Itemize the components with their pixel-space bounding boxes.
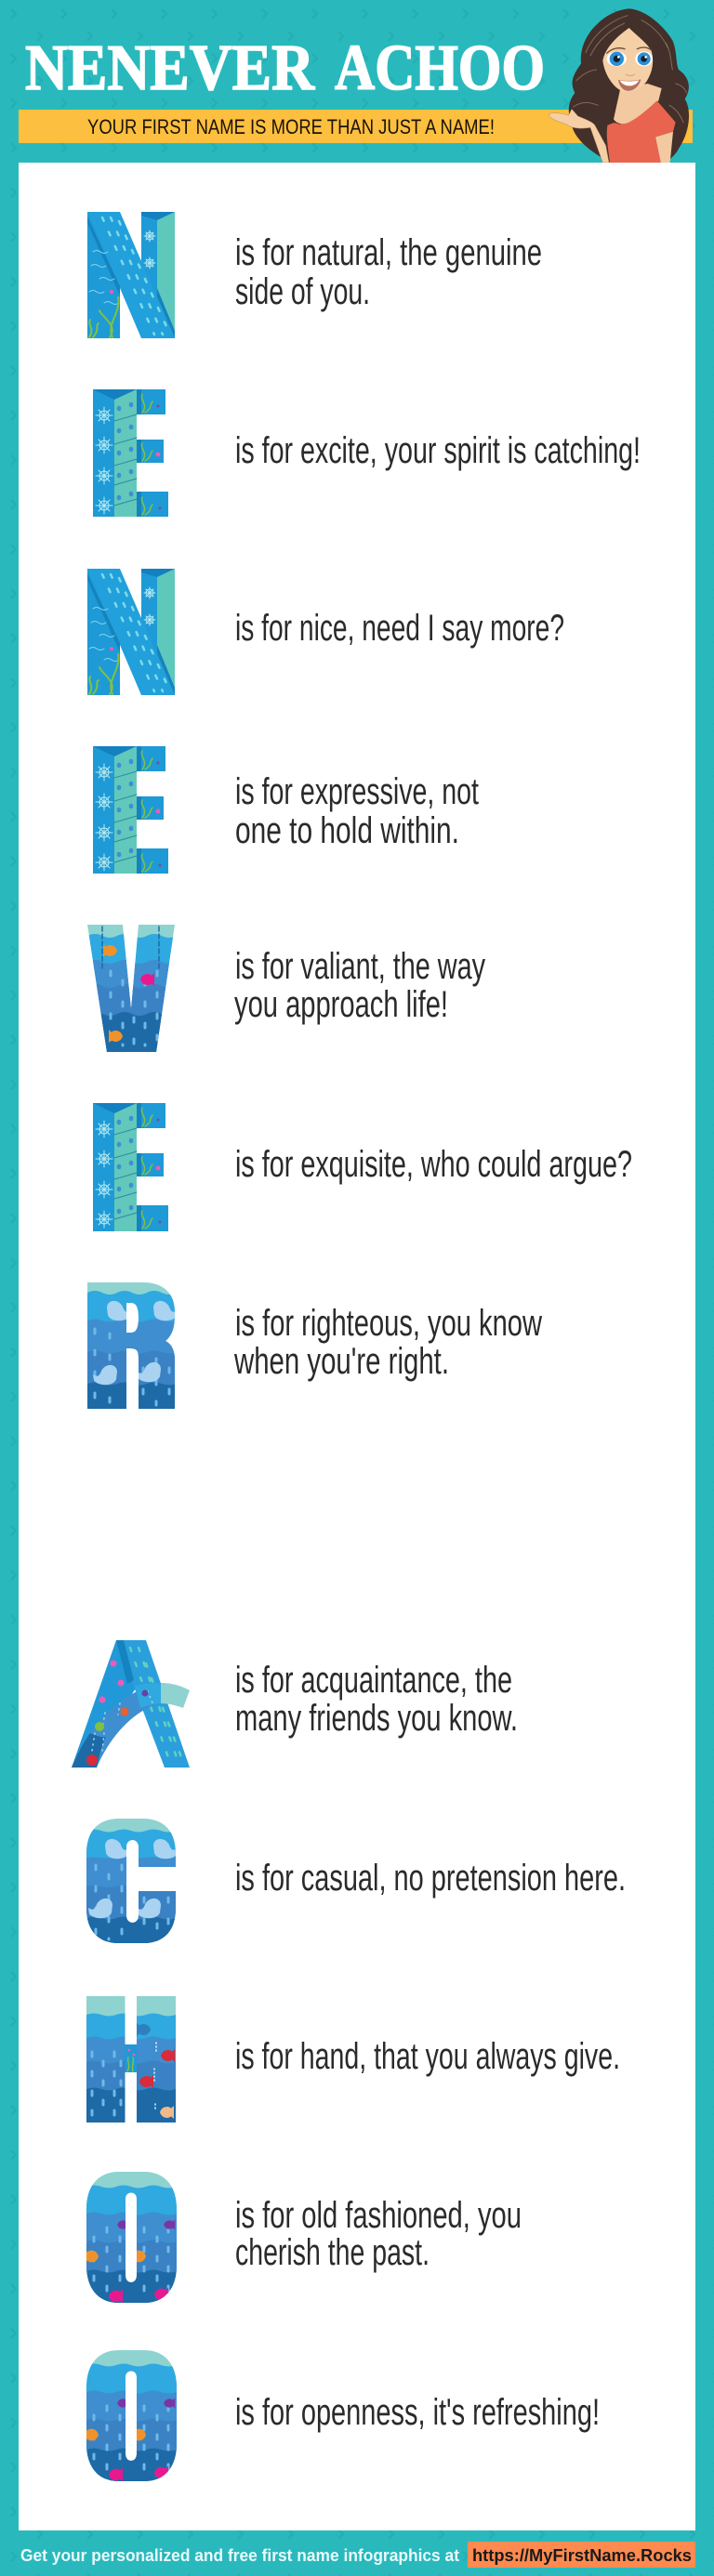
text [235, 2195, 522, 2273]
icon: letter E illustration [93, 746, 168, 874]
row: C casual [86, 1819, 626, 1949]
text: when you're right. [233, 1341, 449, 1382]
subtitle banner [19, 110, 693, 143]
text: is for old fashioned, you [235, 2195, 522, 2236]
row: N nice [87, 569, 564, 695]
title [25, 33, 545, 104]
text: is for valiant, the way [235, 946, 485, 987]
icon: letter E illustration [93, 1103, 168, 1231]
row: O old fashioned [85, 2172, 522, 2307]
row: H hand [86, 1996, 620, 2126]
footer url badge [468, 2542, 695, 2568]
text [233, 1303, 542, 1382]
icon: letter N illustration [87, 569, 175, 695]
icon: letter R illustration [87, 1282, 178, 1413]
text [235, 1660, 518, 1739]
row: E exquisite [93, 1103, 632, 1231]
text: is for expressive, not [235, 771, 479, 812]
icon: letter O illustration [85, 2350, 178, 2485]
text [234, 946, 485, 1025]
title: ACHOO [335, 33, 545, 104]
text: is for nice, need I say more? [235, 608, 564, 649]
row: V valiant [87, 925, 485, 1055]
row: O openness [85, 2350, 600, 2485]
icon: letter O illustration [85, 2172, 178, 2307]
text: many friends you know. [235, 1698, 518, 1739]
row: R righteous [87, 1282, 542, 1413]
text: is for acquaintance, the [235, 1660, 512, 1701]
footer text: Get your personalized and free first name infographics at [20, 2546, 459, 2565]
text: one to hold within. [235, 810, 459, 851]
icon: letter N illustration [87, 212, 175, 338]
footer url badge: https://MyFirstName.Rocks [472, 2546, 692, 2565]
text [235, 771, 479, 851]
text [235, 232, 542, 312]
text: side of you. [235, 271, 370, 312]
footer [20, 2542, 695, 2568]
icon: letter V illustration [87, 925, 177, 1055]
icon: cartoon woman [549, 8, 689, 163]
row: A acquaintance [72, 1640, 518, 1768]
row: E excite [93, 389, 641, 517]
text: you approach life! [234, 984, 448, 1025]
title: NENEVER [25, 33, 315, 104]
row: E expressive [93, 746, 479, 874]
subtitle banner: YOUR FIRST NAME IS MORE THAN JUST A NAME! [87, 115, 495, 138]
row: N natural [87, 212, 542, 338]
icon: letter A illustration [72, 1640, 190, 1768]
text: is for natural, the genuine [235, 232, 542, 273]
icon: letter C illustration [86, 1819, 178, 1949]
icon: letter E illustration [93, 389, 168, 517]
text: cherish the past. [235, 2232, 430, 2273]
icon: letter H illustration [86, 1996, 176, 2126]
text: is for righteous, you know [235, 1303, 542, 1344]
